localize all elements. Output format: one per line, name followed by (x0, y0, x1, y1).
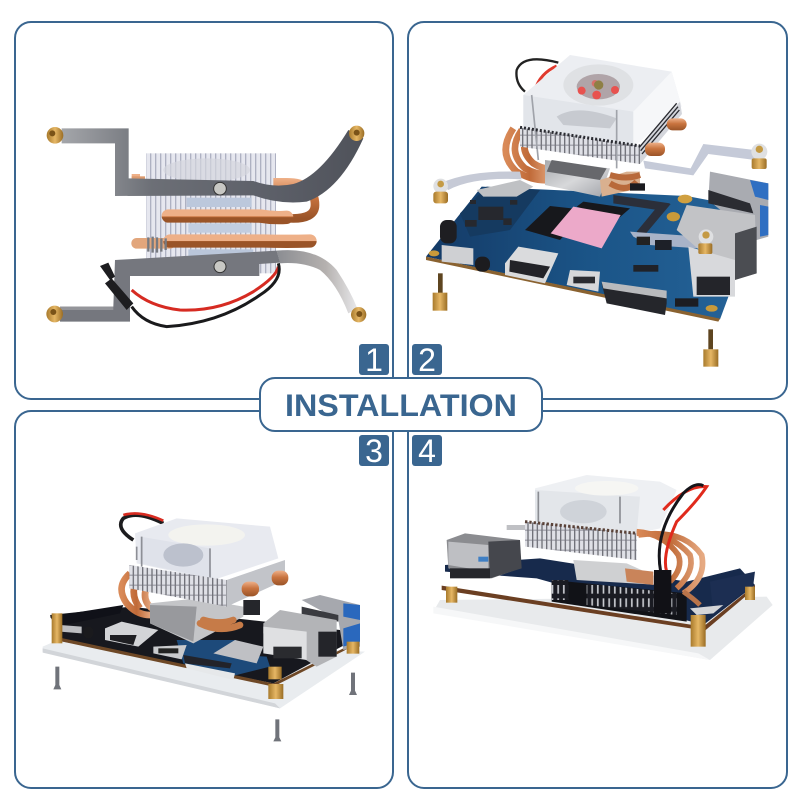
panel: step 2 frame (408, 22, 787, 399)
board (50, 607, 360, 683)
silver block (545, 160, 610, 197)
panel: step 4 frame (408, 411, 787, 788)
bracket nuts and standoffs (433, 179, 448, 193)
title text: INSTALLATION (285, 387, 517, 423)
wires (121, 515, 163, 540)
ethernet (677, 205, 757, 280)
badge: step 3: 3 (365, 433, 383, 469)
fin stack (520, 127, 640, 164)
acrylic plate (43, 638, 365, 708)
standoffs (446, 587, 457, 603)
illustration: heatsink with brackets and heat pipes (46, 126, 366, 327)
badge: step 4: 4 (418, 433, 436, 469)
board (426, 187, 761, 319)
badge: step 2 (412, 342, 442, 378)
fan (135, 518, 278, 580)
illustration: board with heatsink above and standoffs (426, 55, 768, 367)
standoffs (52, 613, 62, 643)
fan (535, 475, 677, 533)
wires and connector (663, 487, 707, 572)
copper tips (667, 118, 687, 130)
illustration: assembled cooler on acrylic base (433, 475, 773, 660)
brackets (440, 171, 522, 190)
badge: step 2: 2 (418, 342, 436, 378)
copper pipes (122, 573, 152, 615)
ribbon connector (602, 283, 667, 315)
panel: step 3 frame (15, 411, 393, 788)
badge: step 3 (359, 433, 389, 469)
acrylic plate (433, 597, 773, 660)
copper pipes (637, 532, 703, 593)
silver block (573, 560, 660, 585)
fan (523, 55, 682, 147)
USB stack (708, 172, 768, 240)
copper tips (272, 571, 288, 585)
illustration: board on acrylic base with screws (43, 513, 365, 741)
mounting screws (53, 667, 61, 689)
board (445, 558, 755, 625)
audio, USB-C, HDMI (442, 245, 473, 265)
badge: step 1 (359, 342, 389, 378)
silver block and pipe ends (150, 598, 243, 643)
fin stack (525, 522, 637, 560)
ports (447, 533, 520, 578)
thermal pad (551, 207, 621, 248)
panel: step 1 frame (15, 22, 393, 399)
front USB (688, 247, 735, 297)
ports (60, 625, 82, 633)
badge: step 4 (412, 433, 442, 469)
title pill (260, 378, 542, 431)
badge: step 1: 1 (365, 342, 383, 378)
fin stack (129, 565, 227, 607)
